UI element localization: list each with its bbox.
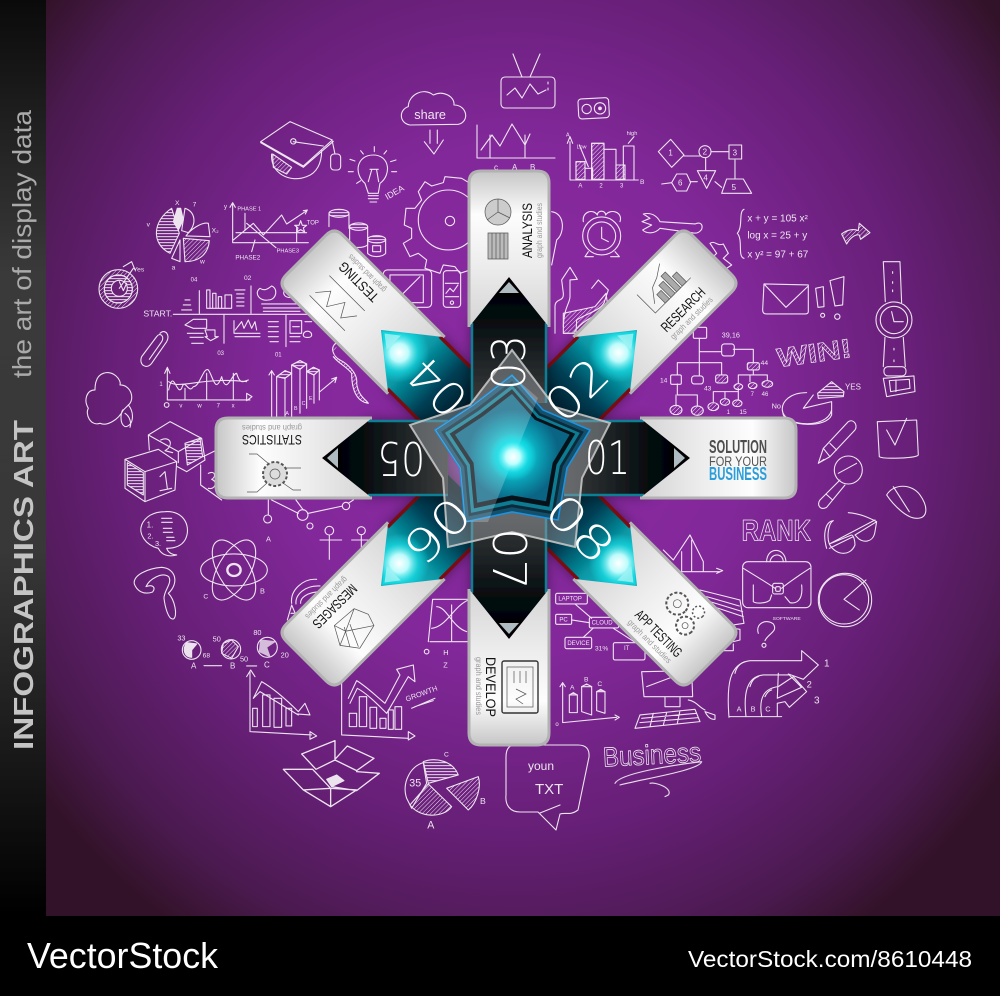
headline: solution for your business: [709, 437, 767, 484]
icon: research bars: [633, 255, 691, 313]
doodle: big number three: [134, 567, 176, 619]
doodle: wifi arcs: [287, 579, 322, 620]
doodle: branching arrows: C: [765, 705, 771, 714]
bottom watermark bar: [0, 916, 1000, 996]
doodle: phase line chart: TOP: [307, 221, 319, 227]
doodle: speech bubble list: 3.: [155, 539, 161, 548]
number 03: 03: [482, 335, 536, 390]
doodle: org chart: 44: [761, 360, 768, 367]
doodle: ABC bars chart: B: [584, 677, 589, 684]
arm 05 statistics: STATISTICS: [242, 432, 302, 448]
doodle: target spiral with yes: Yes: [133, 267, 145, 274]
arm 03 analysis: ANALYSIS: [519, 203, 535, 258]
doodle: org chart: [660, 327, 773, 416]
doodle: small pies row: C: [264, 660, 270, 669]
doodle: bar chart: A: [578, 183, 582, 189]
watermark logo text: VectorStock: [27, 935, 219, 976]
doodle: org chart: 39,16: [722, 330, 740, 339]
arm 04 testing: graph and studies: [346, 252, 388, 295]
arm 06 messages: [278, 469, 498, 689]
doodle: 3D bars with arrow: C: [302, 401, 306, 407]
doodle: tree cloud: [86, 373, 132, 427]
icon: testing line chart: [310, 276, 365, 331]
arm 04 testing: [278, 227, 498, 447]
doodle: your text speech bubble: youn: [528, 759, 554, 773]
doodle: 3D bars with arrow: E: [309, 396, 313, 402]
doodle: 3D pie yes no: No: [772, 401, 781, 410]
doodle: target spiral with yes: [99, 262, 145, 308]
doodle: wave chart: 7: [217, 403, 221, 409]
arm 02 research: RESEARCH: [657, 284, 708, 335]
doodle: small hatched arrow: [842, 223, 870, 244]
doodle: small pies row: [177, 628, 289, 670]
doodle: timeline with start: 04: [191, 278, 198, 284]
doodle: org chart: 43: [704, 386, 712, 393]
doodle: small pies row: A: [191, 661, 197, 670]
doodle: bar chart: A: [566, 133, 570, 139]
doodle: stacked cylinders: [329, 209, 386, 257]
doodle: numbered dice: [125, 422, 222, 502]
doodle: phase line chart: [224, 203, 319, 261]
doodle: exploded pie: 7: [193, 202, 197, 209]
doodle: Business handwriting: Business: [602, 737, 702, 773]
doodle: triangle chart: [663, 535, 723, 573]
doodle: sine chart: [424, 599, 468, 669]
doodle: tablet and phone: [383, 270, 461, 307]
doodle: speech bubble list: 2.: [147, 531, 153, 540]
headline: solution for your business: SOLUTION: [709, 437, 767, 457]
doodle: 3D bars with arrow: B: [294, 406, 298, 412]
doodle: timeline with start: 01: [275, 353, 282, 359]
doodle: math formulas: x + y = 105 x²: [747, 214, 808, 225]
doodle: small line chart: [477, 124, 555, 172]
doodles: top centre: [477, 54, 589, 830]
doodle: pie with 35 and A B: A: [427, 819, 435, 831]
number 01: 01: [585, 431, 630, 485]
doodle: bar chart: high: [627, 131, 637, 137]
doodle: sine chart: H: [443, 648, 449, 657]
arm 03 analysis: [469, 171, 549, 403]
doodle: pie with 35 and A B: C: [444, 752, 449, 759]
doodle: org chart: 46: [762, 392, 769, 398]
doodles: lower right quadrant: [555, 418, 926, 797]
doodle: exclamation marks: [816, 277, 844, 319]
doodle: Business handwriting: [602, 737, 702, 797]
doodle: TV set: [501, 54, 555, 108]
doodle: pie with 35 and A B: [405, 752, 486, 831]
star: centre glow: [489, 433, 537, 481]
doodle: big gear: [403, 177, 478, 273]
doodle: rising bars chart: GROWTH: [404, 684, 439, 704]
doodle: small line chart: c: [494, 163, 498, 172]
doodle: org chart: 1: [727, 410, 731, 416]
doodle: process flow: [658, 139, 752, 193]
doodle: network nodes: A: [266, 535, 271, 544]
doodle: bar chart: B: [640, 179, 645, 186]
doodle: paperclip: [141, 332, 168, 366]
doodle: question mark: SOFTWARE: [773, 616, 801, 622]
doodle: math formulas: x y² = 97 + 67: [747, 249, 809, 260]
arm 05 statistics: graph and studies: [242, 423, 302, 433]
icon: analysis pie and bars: [485, 199, 511, 259]
doodle: 3D bars with arrow: [269, 361, 337, 418]
doodle: small pies row: 50: [240, 655, 248, 664]
doodle: wave chart: w: [196, 403, 202, 409]
doodle: branching arrows: 1: [824, 659, 830, 670]
arm 07 develop: graph and studies: [474, 657, 484, 715]
arm 06 messages: graph and studies: [303, 575, 350, 621]
doodle: atom: [201, 533, 267, 607]
arm 08 app testing: [520, 469, 740, 689]
doodle: timeline with start: [143, 275, 313, 359]
doodle: 3D pie yes no: YES: [845, 382, 861, 391]
star: glass reflection: [435, 375, 538, 522]
arm 08 app testing: APP TESTING: [632, 606, 686, 660]
doodle: small pies row: 80: [253, 628, 261, 637]
doodle: ABC bars chart: o: [555, 722, 559, 728]
icon: messages shield: [327, 603, 381, 657]
doodle: 3D bars with arrow: A: [285, 411, 289, 417]
doodle: pie with 35 and A B: B: [480, 796, 486, 806]
central glass star: [410, 350, 610, 547]
doodle: wall clock: [818, 573, 872, 627]
doodle: small line chart: A: [512, 163, 518, 172]
doodle: org chart: 14: [660, 378, 668, 385]
arm 03 analysis: graph and studies: [534, 203, 544, 258]
doodle: sine chart: Z: [443, 660, 448, 669]
doodle: phase line chart: PHASE3: [277, 249, 299, 255]
doodle: process flow: 4: [703, 174, 708, 183]
doodle: exploded pie: X₂: [212, 228, 219, 235]
number 02: 02: [534, 347, 620, 433]
number 08: 08: [534, 483, 626, 575]
doodle: org chart: 7: [751, 392, 755, 398]
doodle: cloud network: IT: [624, 646, 630, 652]
doodle: pie with 35 and A B: 35: [409, 778, 421, 790]
arm numbers: [377, 335, 630, 590]
doodle: wrist watch: [876, 262, 915, 397]
watermark id text: VectorStock.com/8610448: [688, 946, 972, 972]
doodle: light bulb idea: IDEA: [383, 183, 406, 202]
doodle: bar chart: Low: [577, 144, 587, 150]
number 07: 07: [482, 528, 536, 590]
doodles: top left quadrant: [86, 92, 478, 427]
doodle: network nodes: [264, 500, 353, 544]
doodle: bar chart: 2: [599, 183, 603, 189]
doodle: graduation cap: [261, 122, 341, 179]
doodle: RANK text: RANK: [742, 515, 811, 548]
doodle: bar chart: [566, 131, 645, 189]
doodle: ABC bars chart: [555, 677, 619, 728]
doodle: small line chart: B: [530, 163, 535, 172]
strip title: INFOGRAPHICS ART: INFOGRAPHICS ART: [8, 420, 39, 750]
doodle: puzzle piece: [703, 242, 732, 268]
doodle: WIN text: WIN!: [775, 333, 853, 373]
doodle: cloud network: [556, 593, 645, 660]
doodle: timeline with start: START.: [143, 309, 172, 319]
doodle: exploded pie: X: [175, 200, 180, 207]
doodle: curved hatched ribbon: [333, 342, 368, 403]
strip tagline: the art of display data: [7, 109, 37, 378]
doodle: desktop computer: [635, 671, 715, 728]
doodle: cloud network: LAPTOP: [558, 597, 582, 603]
doodle: share cloud: [401, 92, 466, 154]
doodle: wrench: [642, 214, 702, 233]
doodle: magnifier: [819, 456, 862, 508]
doodle: process flow: 5: [732, 183, 737, 192]
arm 02 research: [520, 227, 740, 447]
arm 04 testing: TESTING: [335, 259, 382, 305]
doodle: goggles box: [578, 98, 609, 119]
doodle: branching arrows: A: [737, 705, 742, 714]
doodle: small pies row: 50: [213, 635, 221, 644]
number 04: 04: [397, 346, 479, 428]
arm 08 app testing: graph and studies: [626, 617, 674, 665]
doodle: curved arrows: [552, 212, 608, 333]
arm 06 messages: MESSAGES: [310, 581, 361, 632]
doodle: share cloud: share: [414, 108, 446, 122]
doodle: envelope: [763, 284, 808, 314]
icon: app gears: [656, 585, 709, 638]
doodle: exploded pie: w: [199, 258, 205, 265]
doodle: mouse: [887, 486, 926, 518]
doodle: exploded pie: [147, 200, 219, 271]
doodle: process flow: 1: [668, 148, 673, 157]
star: inner blue: [435, 375, 590, 522]
doodle: falling bars chart: [247, 670, 317, 739]
headline: solution for your business: BUSINESS: [709, 464, 767, 484]
arm 01 solution for your business: [564, 418, 796, 498]
arm 07 develop: DEVELOP: [483, 657, 499, 717]
headline: solution for your business: FOR YOUR: [709, 453, 767, 469]
doodle: org chart: 15: [739, 409, 747, 416]
doodle: your text speech bubble: TXT: [535, 781, 563, 798]
doodle: branching arrows: 2: [807, 679, 812, 689]
doodle: exploded pie: a: [172, 264, 176, 271]
doodles: lower left quadrant: [125, 422, 486, 831]
doodle: atom: B: [260, 586, 265, 595]
arm 02 research: graph and studies: [668, 295, 715, 341]
doodle: your text speech bubble: [506, 745, 589, 830]
doodle: speech bubble list: 1.: [147, 520, 153, 529]
doodle: timeline with start: 03: [217, 351, 225, 357]
doodle: ABC bars chart: A: [570, 684, 575, 691]
doodle: pencil: [818, 421, 856, 463]
doodle: briefcase: [743, 550, 811, 608]
star: outer glass: [410, 350, 610, 547]
doodle: bar chart: 3: [620, 183, 624, 189]
doodle: light bulb idea: [348, 147, 406, 202]
arm 07 develop: [469, 513, 549, 745]
doodle: stick figures: [320, 526, 371, 559]
doodle: math formulas: [737, 209, 809, 260]
number 05: 05: [377, 431, 425, 485]
icon: develop tablet: [502, 661, 538, 713]
doodle: process flow: 2: [703, 148, 708, 157]
doodle: phase line chart: PHASE 1: [237, 207, 261, 213]
doodle: branching arrows: 3: [814, 695, 820, 706]
doodle: cloud network: CLOUD: [592, 621, 613, 627]
doodle: rising bars chart: [342, 665, 439, 740]
doodle: wave chart: 1: [159, 382, 163, 388]
doodle: small pies row: 68: [203, 652, 210, 659]
doodle: wave chart: v: [179, 403, 182, 409]
doodle: timeline with start: 02: [244, 275, 252, 282]
doodles: top right quadrant: [552, 98, 915, 424]
doodle: branching arrows: [728, 651, 830, 717]
doodle: small pies row: 20: [281, 650, 289, 659]
doodle: wave chart: x: [232, 403, 235, 409]
doodle: question mark: [758, 616, 801, 647]
left side strip: [0, 0, 46, 916]
doodle: stack of books: [700, 590, 744, 651]
doodle: 3D pie yes no: [772, 382, 861, 424]
doodle: wave chart: [159, 367, 252, 409]
doodle: open box: [283, 741, 379, 807]
doodle: cloud network: 31%: [595, 646, 608, 653]
arm 05 statistics: [216, 418, 448, 498]
doodle: phase line chart: PHASE2: [235, 254, 261, 261]
doodle: speech bubble list: [141, 512, 187, 556]
doodle: math formulas: log x = 25 + y: [747, 230, 807, 241]
doodle: alarm clock: [583, 211, 621, 257]
doodle: glasses: [825, 513, 877, 553]
doodle: ABC bars chart: C: [597, 681, 602, 688]
doodle: atom: C: [203, 593, 208, 600]
doodle: exploded pie: v: [147, 222, 151, 229]
doodle: process flow: 3: [733, 148, 738, 157]
doodle: cloud network: DEVICE: [567, 641, 590, 647]
doodle: process flow: 6: [678, 178, 683, 187]
doodle: small pies row: 33: [177, 634, 185, 643]
doodle: branching arrows: B: [751, 705, 756, 714]
doodle: check box: [877, 418, 918, 458]
icon: statistics gear: [247, 454, 301, 492]
infographic wheel: [216, 171, 796, 745]
number 06: 06: [392, 486, 481, 575]
doodle: small pies row: B: [230, 661, 235, 670]
doodle: cloud network: PC: [559, 618, 568, 624]
doodle: phase line chart: y: [224, 204, 227, 210]
